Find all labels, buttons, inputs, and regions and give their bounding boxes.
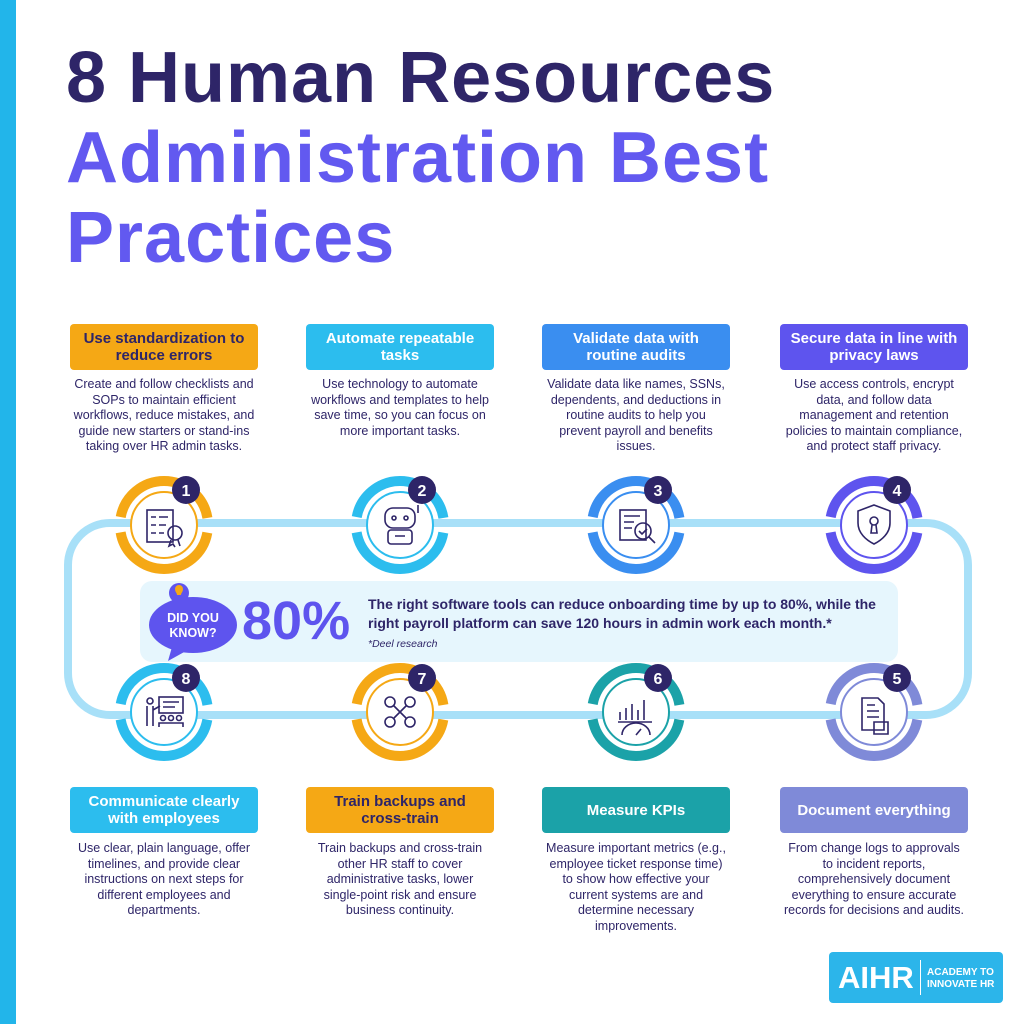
diagram: track and rings: 3: [654, 483, 663, 500]
icon: network people: [385, 697, 415, 727]
speech bubble: DID YOU: [167, 611, 219, 625]
logo: AIHR: AIHR: [838, 960, 914, 995]
label 7: Train backups and cross-train: [334, 793, 466, 827]
desc 6: Measure important metrics (e.g., employee ticket response time) to show how effective your current systems are and determine necessary improvements.: [546, 841, 726, 932]
desc 3: Validate data like names, SSNs, dependents, and deductions in routine audits to help you prevent payroll and benefits issues.: [547, 377, 725, 453]
stat 80%: 80%: [242, 591, 350, 651]
diagram: track and rings: 5: [893, 671, 902, 688]
track loop: [68, 523, 968, 715]
ring 7: [356, 668, 444, 756]
label 1: Use standardization to reduce errors: [84, 330, 244, 364]
label 6: Measure KPIs: [587, 802, 685, 818]
title: 8 Human Resources: [66, 38, 775, 118]
ring 6: [592, 668, 680, 756]
label 5: Document everything: [797, 802, 951, 818]
diagram: track and rings: 7: [418, 671, 427, 688]
icon: presenter: [147, 697, 183, 727]
label 8: [70, 787, 258, 833]
callout: did you know: [140, 581, 898, 662]
label 3: [542, 324, 730, 370]
logo: AIHR: ACADEMY TO: [927, 967, 994, 978]
label 2: [306, 324, 494, 370]
desc 1: Create and follow checklists and SOPs to maintain efficient workflows, reduce mistakes, and guide new starters or stand-ins taking over HR admin tasks.: [74, 377, 254, 453]
icon: robot: [385, 505, 418, 544]
diagram: track and rings: 4: [893, 483, 902, 500]
logo: AIHR: INNOVATE HR: [927, 979, 994, 990]
ring 5: [830, 668, 918, 756]
title: Administration Best: [66, 118, 769, 198]
icon: KPI gauge: [618, 700, 652, 735]
label 4: Secure data in line with privacy laws: [791, 330, 957, 364]
ring 4: [830, 481, 918, 569]
ring 8: [120, 668, 208, 756]
desc 4: Use access controls, encrypt data, and follow data management and retention policies to maintain compliance, and protect staff privacy.: [786, 377, 962, 453]
label 8: Communicate clearly with employees: [89, 793, 239, 827]
stat text: [368, 596, 876, 650]
logo: AIHR: [829, 952, 1003, 1003]
icon: checklist: [147, 510, 182, 547]
speech bubble: [149, 583, 237, 661]
title: [66, 38, 775, 278]
desc 7: Train backups and cross-train other HR staff to cover administrative tasks, lower single-point risk and ensure business continuity.: [318, 841, 482, 917]
label 7: [306, 787, 494, 833]
desc 2: Use technology to automate workflows and templates to help save time, so you can focus on more important tasks.: [311, 377, 489, 438]
stat text: The right software tools can reduce onboarding time by up to 80%, while the right payroll platform can save 120 hours in admin work each month.*: [368, 596, 876, 631]
icon: shield: [858, 505, 890, 544]
ring 3: [592, 481, 680, 569]
label 3: Validate data with routine audits: [573, 330, 699, 364]
desc 5: From change logs to approvals to incident reports, comprehensively document everything to ensure accurate records for decisions and audits.: [784, 841, 964, 917]
diagram: track and rings: 1: [182, 483, 191, 500]
badges: [172, 476, 911, 692]
desc 8: Use clear, plain language, offer timelines, and provide clear instructions on next steps for different employees and departments.: [78, 841, 250, 917]
label 5: [780, 787, 968, 833]
left accent bar: [0, 0, 16, 1024]
label 1: [70, 324, 258, 370]
diagram: track and rings: 2: [418, 483, 427, 500]
icon: audit: [620, 510, 655, 543]
stat text: *Deel research: [368, 638, 437, 650]
speech bubble: KNOW?: [169, 626, 217, 640]
diagram: track and rings: 8: [182, 671, 191, 688]
icon: documents: [862, 698, 888, 734]
title: Practices: [66, 198, 395, 278]
diagram: track and rings: 6: [654, 671, 663, 688]
label 2: Automate repeatable tasks: [326, 330, 474, 364]
label 4: [780, 324, 968, 370]
label 6: [542, 787, 730, 833]
ring 1: [120, 481, 208, 569]
ring 2: [356, 481, 444, 569]
